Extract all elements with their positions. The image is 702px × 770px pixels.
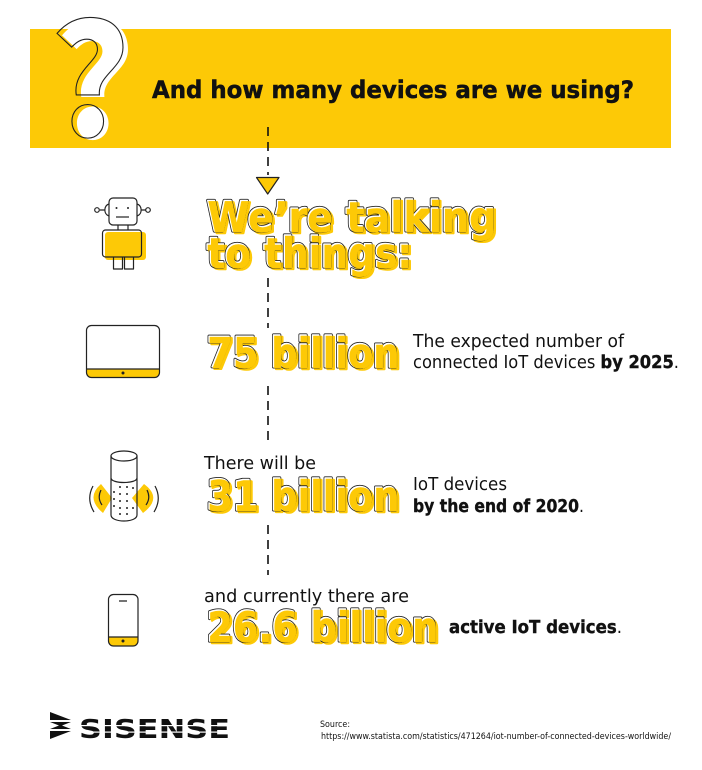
title: we're talking to things: We’re talking	[206, 192, 496, 241]
title: we're talking to things: to things:	[206, 228, 412, 277]
stat: 31 billion: 31 billion	[209, 473, 401, 522]
banner	[30, 29, 671, 148]
source: https://www.statista.com/statistics/471264/iot-number-of-connected-devices-worldwide/	[321, 732, 671, 742]
logo: sisense: SISENSE	[79, 715, 230, 745]
text: expected number: The expected number of	[412, 331, 625, 352]
text: active iot devices: active IoT devices.	[449, 617, 622, 638]
logo: sisense	[50, 712, 231, 745]
icon: phone	[108, 594, 138, 646]
arrow: top dashed connector	[256, 127, 279, 194]
title: we're talking to things: We’re talking	[209, 194, 498, 243]
text: and currently there are: and currently there are	[204, 586, 409, 607]
heading: And how many devices are we using?	[152, 76, 634, 104]
title: we're talking to things	[206, 192, 498, 279]
text: there will be: There will be	[203, 453, 316, 474]
stat: 75 billion: 75 billion	[206, 328, 398, 377]
icon: tablet	[86, 326, 160, 378]
text: iot devices by end of 2020: IoT devices	[413, 474, 507, 495]
icon: robot	[95, 198, 150, 269]
text: expected number: connected IoT devices by 2025.	[413, 352, 679, 373]
title: we're talking to things: to things:	[206, 228, 412, 277]
text: iot devices by end of 2020	[413, 474, 584, 517]
stat: 26.6 billion: 26.6 billion	[209, 604, 440, 653]
text: expected number	[412, 331, 679, 373]
arrow: middle dashed connector	[267, 278, 269, 442]
stat: 75 billion: 75 billion	[209, 330, 401, 379]
stat: 75 billion: 75 billion	[206, 328, 398, 377]
title: we're talking to things: We’re talking	[208, 193, 496, 242]
text: iot devices by end of 2020: by the end of 2020.	[413, 496, 584, 517]
title: we're talking to things: to things:	[209, 230, 414, 279]
source: Source:	[320, 720, 350, 730]
stat: 31 billion: 31 billion	[208, 472, 400, 521]
arrow: lower dashed connector	[267, 525, 269, 575]
stat: 75 billion: 75 billion	[208, 329, 400, 378]
title: we're talking to things: We’re talking	[206, 192, 496, 241]
title: we're talking to things: to things:	[208, 229, 412, 278]
stat: 31 billion: 31 billion	[206, 471, 398, 520]
stat: 26.6 billion: 26.6 billion	[206, 602, 438, 651]
icon: smart speaker	[90, 451, 158, 521]
stat: 26.6 billion: 26.6 billion	[206, 602, 438, 651]
source	[320, 720, 671, 742]
stat: 31 billion: 31 billion	[206, 471, 398, 520]
stat: 26.6 billion: 26.6 billion	[208, 603, 438, 652]
